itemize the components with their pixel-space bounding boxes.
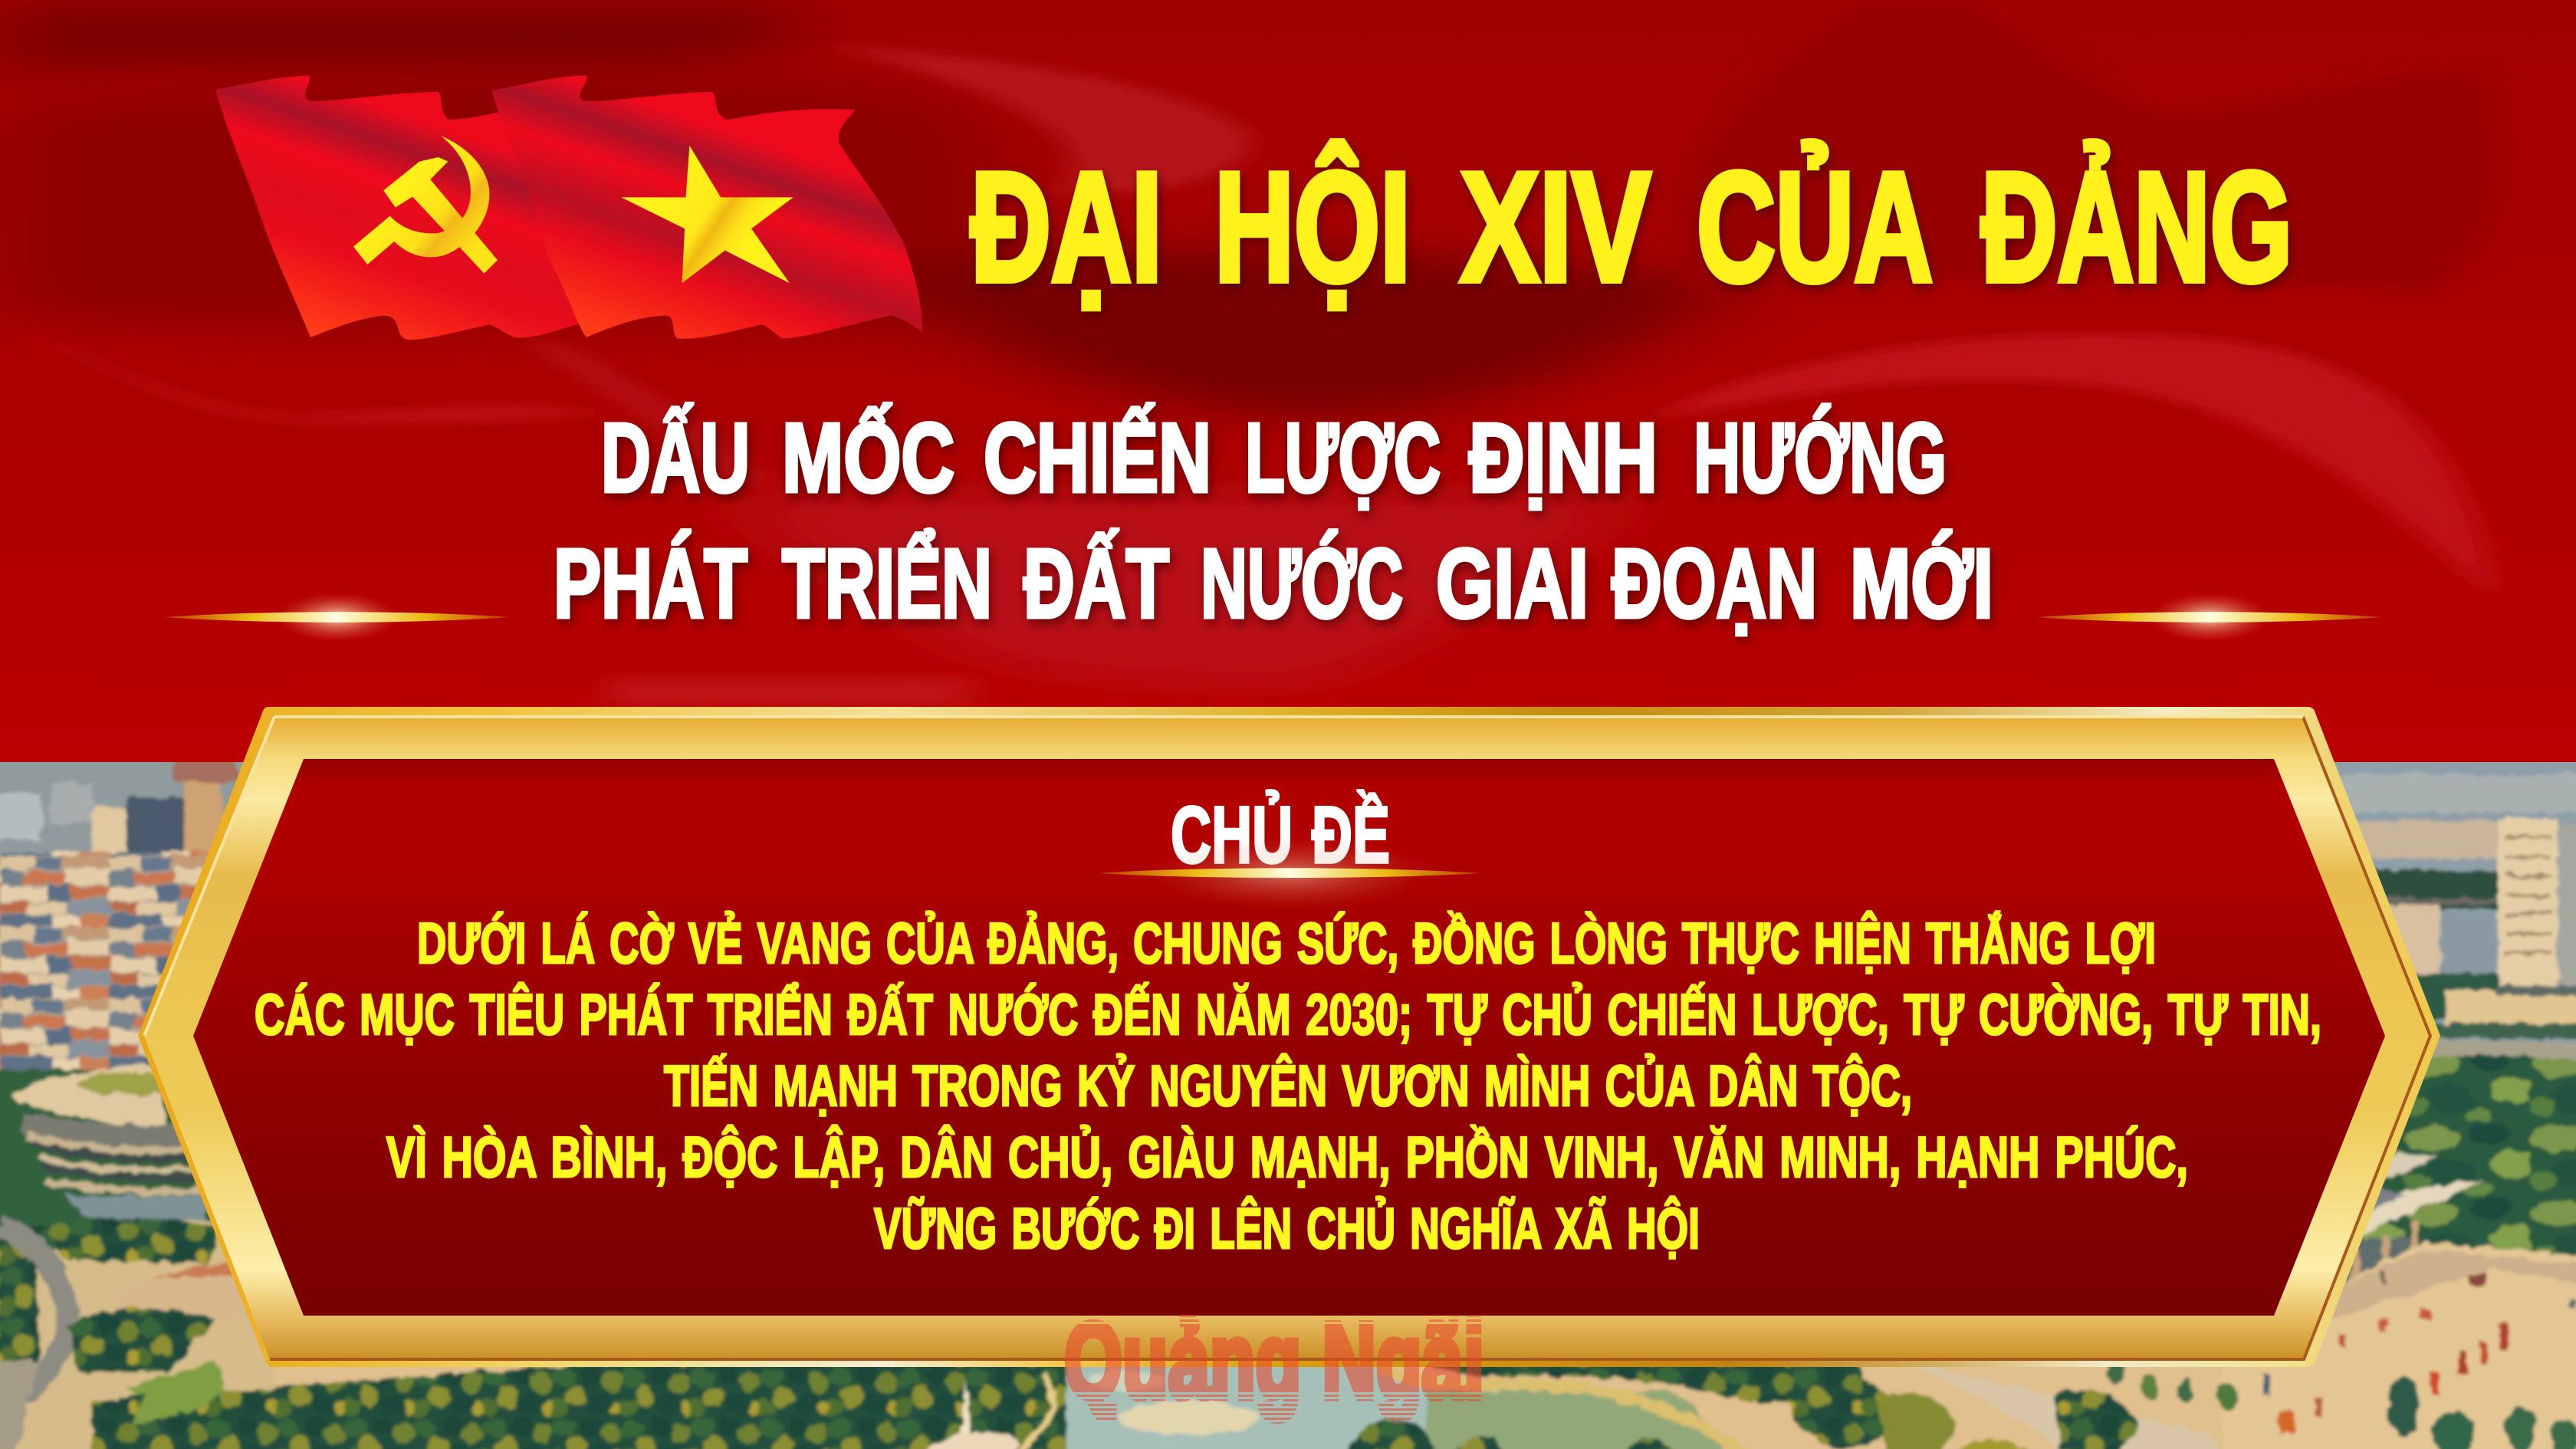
subtitle <box>554 403 1993 639</box>
background: red silk <box>0 0 2576 762</box>
subtitle: ĐỊNH <box>1469 403 1658 513</box>
text block: theme statement: VỮNG BƯỚC ĐI LÊN CHỦ NGHĨA XÃ HỘI <box>874 1196 1700 1260</box>
subtitle: HƯỚNG <box>1694 403 1947 513</box>
subtitle: GIAI <box>1436 529 1589 639</box>
left rooftops <box>0 847 209 1075</box>
title: HỘI <box>1214 140 1411 314</box>
decorative light left <box>164 593 509 642</box>
decorative light right <box>2037 593 2382 642</box>
text block: theme statement: TIẾN MẠNH TRONG KỶ NGUYÊN VƯƠN MÌNH CỦA DÂN TỘC, <box>664 1053 1912 1118</box>
icon: Party flag with hammer and sickle <box>215 75 583 340</box>
title: ĐẢNG <box>1981 140 2292 314</box>
subtitle: NƯỚC <box>1201 529 1403 639</box>
title: ĐẠI <box>971 140 1162 314</box>
right pavilion roof <box>2344 1150 2486 1285</box>
heading: CHỦ ĐỀ: CHỦ ĐỀ <box>1171 790 1390 880</box>
decorative light under heading <box>1099 836 1480 910</box>
icon: star <box>621 146 794 283</box>
subtitle: PHÁT <box>554 529 748 639</box>
subtitle: MỐC <box>782 403 955 513</box>
title: XIV <box>1460 140 1651 314</box>
subtitle: DẤU <box>601 403 750 513</box>
icon: sickle <box>353 136 489 264</box>
subtitle: ĐOẠN <box>1612 529 1817 639</box>
bottom strip: lake <box>1066 1361 1748 1449</box>
right plaza and figures <box>2262 1237 2576 1435</box>
frame outer rim <box>138 707 2440 1367</box>
right skyline and towers <box>2334 762 2576 1063</box>
subtitle: MỚI <box>1850 529 1993 639</box>
watermark: Quảng Ngãi: Quảng Ngãi <box>1064 1300 1484 1421</box>
title: CỦA <box>1697 140 1933 314</box>
subtitle: TRIỂN <box>782 529 992 639</box>
left round building <box>0 1064 230 1254</box>
subtitle: ĐẤT <box>1024 529 1169 639</box>
icon: hammer <box>383 157 498 274</box>
bottom strip: monument <box>924 1372 1053 1449</box>
subtitle: CHIẾN <box>984 403 1211 513</box>
plaza trees <box>2107 1359 2576 1449</box>
left skyline <box>0 762 244 857</box>
city illustration: left, right and bottom <box>0 736 2576 1449</box>
title <box>971 140 2292 314</box>
bottom strip: right bank trees <box>1418 1361 2223 1449</box>
panel: golden hexagon theme frame <box>138 707 2440 1367</box>
bottom strip: trees <box>0 1361 1070 1449</box>
right forest <box>2361 1052 2576 1258</box>
frame gold body <box>144 717 2430 1359</box>
icon: Vietnam flag with star <box>492 75 922 339</box>
left park and road <box>0 1217 276 1449</box>
subtitle: LƯỢC <box>1245 403 1441 513</box>
text block: theme statement <box>255 911 2321 1260</box>
panel: dark red hexagon <box>193 759 2385 1316</box>
